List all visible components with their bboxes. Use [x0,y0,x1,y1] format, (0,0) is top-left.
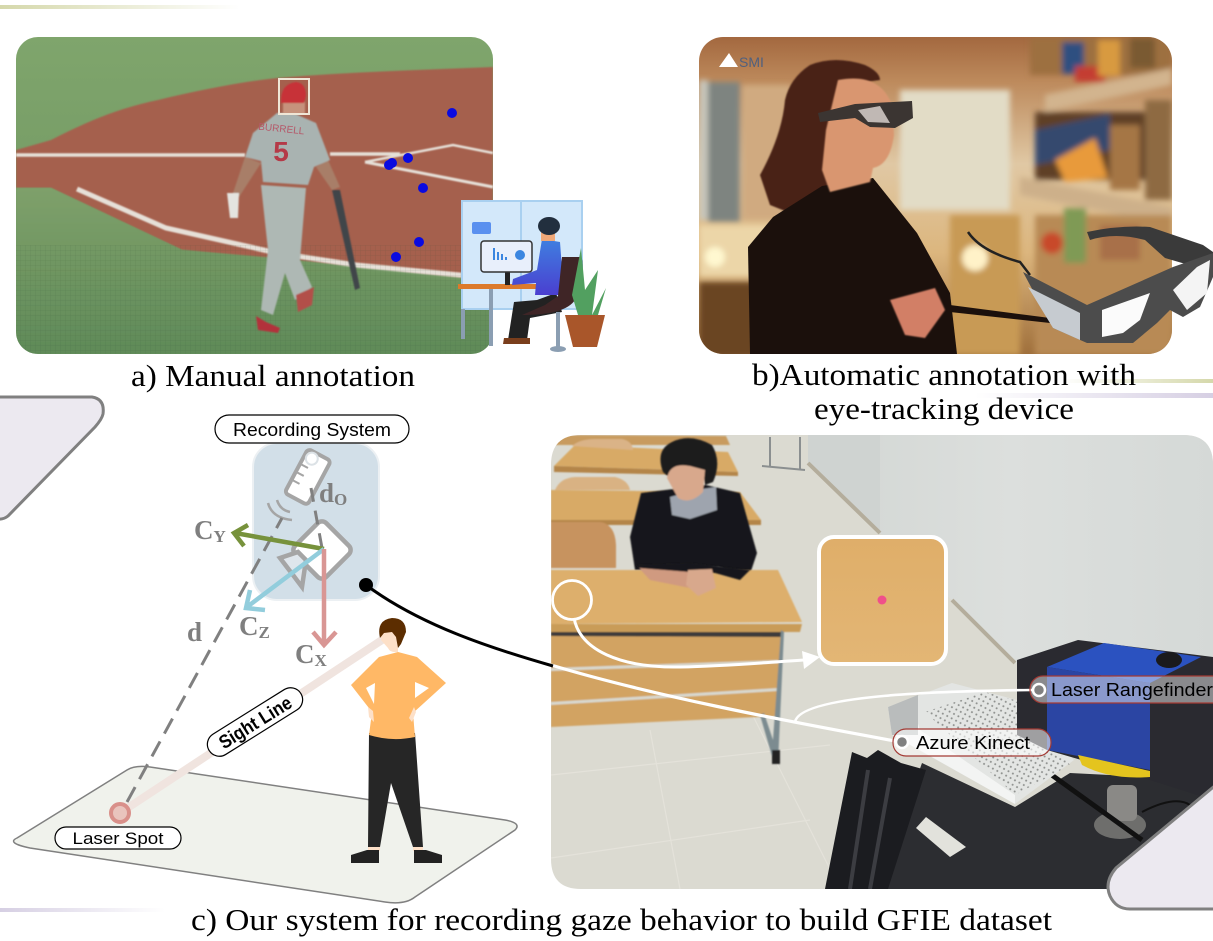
Azure Kinect device [888,683,1074,804]
sight line [120,640,382,813]
distance d0 dashed line [311,488,322,548]
caption c: c) Our system for recording gaze behavior to build GFIE dataset [191,902,1052,937]
laser rangefinder device [1017,640,1213,800]
Azure Kinect label [893,729,1051,756]
safety net [16,245,493,354]
jersey name: BURRELL [258,122,305,137]
axis and distance labels: C [239,611,258,641]
axis and distance labels: d [319,478,334,508]
black connector from recording system [359,578,553,666]
standing person [351,618,446,863]
caption b: eye-tracking device [814,391,1074,426]
laser spot label [55,827,181,849]
icon: laser rangefinder [285,449,331,505]
panel: automatic annotation photo [699,37,1172,357]
recording system label: Recording System [233,420,391,440]
distance d dashed line [127,518,282,802]
caption a: a) Manual annotation [131,358,416,393]
recording system box [253,443,379,600]
axis CZ arrow [246,549,324,610]
laser rangefinder label: Laser Rangefinder [1051,680,1213,700]
main desk [551,570,802,764]
laser spot marker [111,804,129,822]
chalk lines [16,145,493,276]
jersey number: 5 [273,136,289,167]
gaze annotation points [384,108,457,262]
background desks [551,435,761,568]
caption b [752,357,1137,426]
man's arms on desk [638,566,750,596]
axis and distance labels: C [194,515,214,545]
woman face [822,78,894,192]
sight line label: Sight Line [215,693,296,754]
woman hair [760,60,880,213]
panel: recording room photo [551,435,1213,889]
axis and distance labels: O [334,490,347,509]
axis and distance labels: X [314,651,328,670]
SMI logo [719,53,763,67]
eye-tracking glasses product [968,227,1213,343]
infield dirt [16,67,493,300]
white connector to Azure Kinect [551,665,895,741]
axis and distance labels: C [295,639,314,669]
axis and distance labels [187,478,347,670]
smart glasses on woman [818,101,913,128]
floor mat [14,766,517,903]
laser spot label: Laser Spot [72,830,164,848]
floor tile lines [551,718,830,889]
Azure Kinect label: Azure Kinect [916,733,1030,753]
lower grass [16,188,493,354]
axis and distance labels: d [187,617,202,647]
woman hands [890,288,945,338]
head bounding box [279,79,309,114]
caption b: b)Automatic annotation with [752,357,1137,392]
corner shape top left [0,397,103,519]
store background blur [699,37,1172,357]
baseball player [227,82,360,333]
axis and distance labels: Y [214,527,226,546]
inset: zoomed laser spot [819,537,946,664]
axis CX arrow [313,549,336,645]
panel: manual annotation photo [16,37,493,354]
icon: Azure Kinect [280,519,353,587]
white wall [930,435,1213,663]
white connector to laser rangefinder [795,690,1032,722]
axis CY arrow [234,525,324,549]
laser spot highlight circle [552,580,592,620]
background cart [762,437,805,470]
axis and distance labels: Z [258,623,270,642]
corner shape bottom right [1108,784,1213,909]
laser rangefinder label [1030,676,1213,703]
seated man torso [630,438,757,577]
icon: signal waves [268,500,292,520]
SMI logo: SMI [739,54,764,70]
icon: person at computer [458,201,606,352]
woman shirt [748,178,957,354]
table and rail mount [825,750,1213,889]
white curved arrow to inset [574,618,820,669]
recording system label [215,415,409,443]
